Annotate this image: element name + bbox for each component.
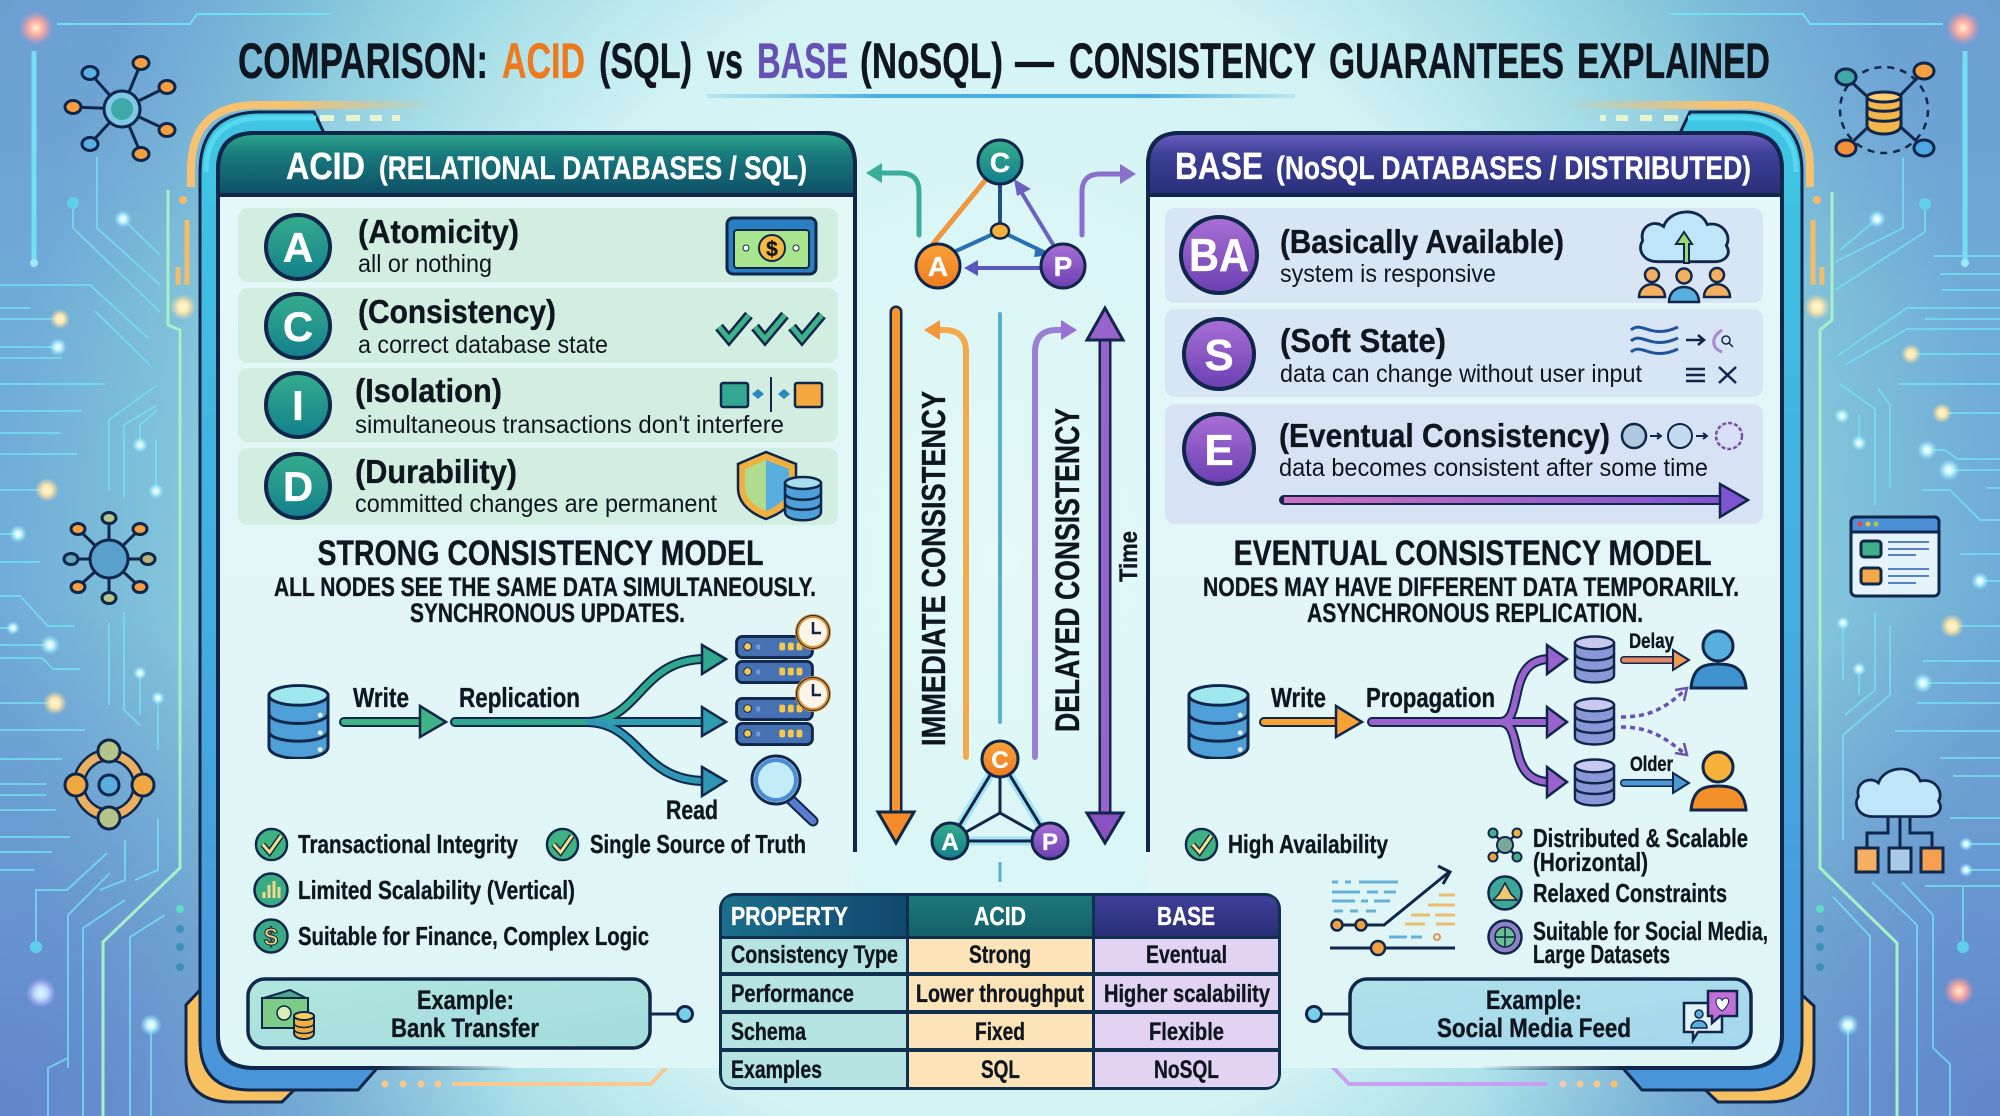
benefit: single source of truth [547,829,806,860]
eventual consistency heading [1203,534,1739,628]
ACID header: ACID [286,146,365,188]
arrow: immediate consistency orange [878,312,914,843]
write arrow orange [1264,682,1362,737]
row: schema [731,1018,1224,1046]
BASE header [1148,133,1782,195]
benefit: transactional integrity: Transactional Integrity [298,829,518,859]
table header: PROPERTY [731,901,848,931]
icon: network globe left [64,512,155,604]
title: COMPARISON: [238,33,488,89]
row: Consistency [238,288,838,363]
row: Isolation: I [292,382,304,429]
row: performance: Higher scalability [1104,980,1270,1008]
propagation branching arrow: Propagation [1366,682,1495,713]
example: social media feed [1306,979,1751,1048]
row: schema: Fixed [975,1018,1025,1046]
CAP triangle bottom: A [941,829,959,856]
row: Eventual Consistency: (Eventual Consistency) [1279,417,1610,454]
benefit: distributed and scalable: Distributed & Scalable [1533,823,1748,853]
use case: social media [1488,916,1768,969]
row: Durability: committed changes are permanent [355,490,717,518]
propagation branching arrow [1366,645,1567,797]
title: CONSISTENCY [1069,33,1316,89]
write arrow [344,682,446,737]
replication branching arrow [455,645,726,796]
left outer frame [186,105,440,1102]
benefit: relaxed constraints: Relaxed Constraints [1533,878,1727,908]
CAP triangle bottom: P [1042,829,1058,856]
row: examples: NoSQL [1154,1056,1219,1084]
eventual consistency heading: NODES MAY HAVE DIFFERENT DATA TEMPORARILY. [1203,572,1739,602]
row: examples [731,1056,1219,1084]
older path and user: Older [1630,753,1673,776]
icon: changing state [1631,327,1736,383]
icon: convergence circles [1622,423,1742,449]
row: consistency type: Consistency Type [731,941,898,969]
table header: ACID [974,901,1026,931]
arrow: thin purple [1035,320,1077,757]
arrow: thin orange [924,320,966,757]
benefit: relaxed constraints [1488,876,1727,910]
delayed consistency label: DELAYED CONSISTENCY [1049,408,1087,732]
use case: finance: $ [264,923,278,951]
row: Atomicity: (Atomicity) [358,213,519,250]
time label: Time [1115,531,1143,582]
strong consistency heading: ALL NODES SEE THE SAME DATA SIMULTANEOUSLY. [274,572,816,602]
row: Consistency: (Consistency) [358,293,556,330]
benefit: transactional integrity [256,829,518,860]
icon: money note [727,218,816,274]
right outer frame [1560,105,1814,1102]
limitation: limited scalability: Limited Scalability (Vertical) [298,875,575,905]
icon: cloud network right [1856,769,1943,872]
icon: replica databases [1575,637,1614,805]
icon: app window right [1851,517,1939,596]
title: GUARANTEES [1329,33,1564,89]
icon: shield and database [738,452,821,520]
write arrow orange: Write [1271,682,1326,713]
table header [731,901,1215,931]
example: bank transfer [248,979,692,1048]
use case: finance [254,920,649,952]
icon: source database [269,686,328,758]
arrow: teal to ACID [866,163,919,235]
title: ACID [502,33,585,89]
row: Soft State: S [1204,331,1234,380]
icon: network hub top left [65,56,175,160]
limitation: limited scalability [254,874,575,906]
row: examples: SQL [981,1056,1020,1084]
row: Atomicity: all or nothing [358,250,492,278]
title: EXPLAINED [1577,33,1770,89]
CAP triangle bottom [932,741,1068,859]
benefit: distributed and scalable: (Horizontal) [1533,847,1648,877]
write arrow: Write [353,682,409,713]
icon: isolated blocks [721,377,822,412]
icon: three checks [719,315,822,339]
panel: BASE [1148,133,1782,1068]
arrow: purple to BASE [1082,164,1136,235]
example: social media feed: Social Media Feed [1437,1013,1631,1043]
row: performance: Lower throughput [916,980,1085,1008]
center divider line [998,314,1002,882]
delay path and user [1624,630,1746,688]
title: (NoSQL) [860,33,1003,89]
benefit: single source of truth: Single Source of Truth [590,829,806,859]
eventual consistency heading: ASYNCHRONOUS REPLICATION. [1307,598,1643,628]
row: consistency type: Strong [969,941,1031,969]
delay path and user: Delay [1629,630,1674,653]
eventual consistency heading: EVENTUAL CONSISTENCY MODEL [1234,534,1712,573]
row: performance: Performance [731,980,854,1008]
row: schema: Flexible [1149,1018,1224,1046]
strong consistency heading: STRONG CONSISTENCY MODEL [318,534,764,573]
row: Soft State [1165,309,1763,397]
strong consistency heading: SYNCHRONOUS UPDATES. [410,598,685,628]
CAP triangle top: C [990,147,1010,178]
use case: social media: Suitable for Social Media, [1533,916,1768,946]
row: consistency type: Eventual [1146,941,1227,969]
row: consistency type [731,941,1227,969]
row: Durability: (Durability) [355,453,517,490]
BASE header: BASE [1175,146,1263,188]
left circuit decoration [0,11,330,1116]
panel: ACID [218,133,855,1068]
example: bank transfer: Example: [417,985,514,1015]
CAP triangle top [916,140,1085,288]
replication branching arrow: Replication [459,682,580,713]
CAP triangle top: P [1054,251,1072,282]
row: Consistency: C [283,303,313,350]
row: examples: Examples [731,1056,822,1084]
icon: synced servers [737,616,830,745]
row: Basically Available: system is responsive [1280,260,1496,288]
title: (SQL) [599,33,692,89]
strong consistency heading [274,534,816,628]
ACID header: (RELATIONAL DATABASES / SQL) [379,150,807,186]
row: Consistency: a correct database state [358,331,608,359]
row: Isolation: (Isolation) [355,372,502,409]
title: BASE [757,33,848,89]
row: Basically Available [1165,208,1763,303]
title: vs [707,33,743,89]
arrow: time double-headed [1087,308,1123,843]
icon: cloud upload users [1639,212,1730,302]
title: — [1015,33,1054,89]
benefit: distributed and scalable [1488,823,1748,877]
icon: primary database [1189,686,1248,758]
immediate consistency label: IMMEDIATE CONSISTENCY [915,391,952,746]
row: Soft State: data can change without user input [1280,360,1642,388]
icon: magnifier and read label: Read [666,795,718,825]
right circuit decoration [1670,11,2000,1116]
row: Durability [238,448,838,525]
use case: social media: Large Datasets [1533,939,1670,969]
row: Isolation [238,368,838,442]
row: Eventual Consistency: E [1204,426,1234,475]
icon: money note: $ [766,238,778,261]
row: Basically Available: BA [1189,229,1249,281]
use case: finance: Suitable for Finance, Complex Logic [298,921,649,951]
row: Eventual Consistency: data becomes consistent after some time [1279,454,1708,482]
row: schema: Schema [731,1018,807,1046]
icon: ring nodes left [65,740,154,829]
table header: BASE [1157,901,1215,931]
row: performance [731,980,1270,1008]
icon: magnifier and read label [666,756,813,825]
dashed replication arrows [1621,688,1687,755]
row: Durability: D [283,463,313,510]
example: bank transfer: Bank Transfer [391,1013,539,1043]
ACID header [218,133,855,195]
row: Atomicity: A [283,224,313,271]
older path and user [1624,752,1746,810]
row: Isolation: simultaneous transactions don't interfere [355,411,784,439]
example: social media feed: Example: [1486,985,1582,1015]
chart: staggered replication timeline [1330,866,1455,955]
row: Atomicity [238,208,838,282]
benefit: high availability [1186,829,1388,860]
benefit: high availability: High Availability [1228,829,1388,859]
row: Eventual Consistency [1165,404,1763,524]
CAP triangle top: A [928,251,948,282]
BASE header: (NoSQL DATABASES / DISTRIBUTED) [1276,150,1751,186]
row: Basically Available: (Basically Available) [1280,223,1564,260]
decorative top dots and bottom lines [320,118,1678,1088]
title [238,33,1770,98]
icon: database network top right [1836,63,1934,156]
row: Soft State: (Soft State) [1280,322,1446,359]
comparison table [719,893,1281,1090]
CAP triangle bottom: C [991,747,1009,774]
